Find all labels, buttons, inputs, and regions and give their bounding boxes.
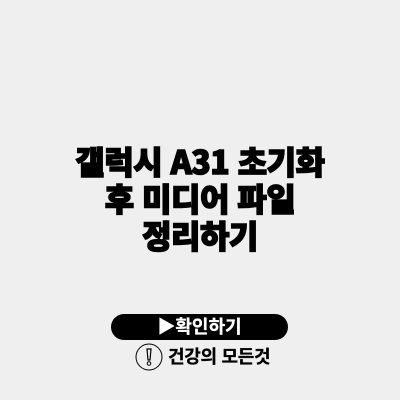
title: 정리하기 xyxy=(142,212,258,258)
confirm button xyxy=(111,314,288,340)
site name: 건강의 모든것 xyxy=(168,347,270,367)
title xyxy=(75,138,326,258)
title: 후 미디어 파일 xyxy=(105,175,295,221)
icon: exclamation in circle xyxy=(136,344,162,370)
title: 갤럭시 A31 초기화 xyxy=(75,138,325,184)
confirm button: ▶확인하기 xyxy=(157,317,242,337)
